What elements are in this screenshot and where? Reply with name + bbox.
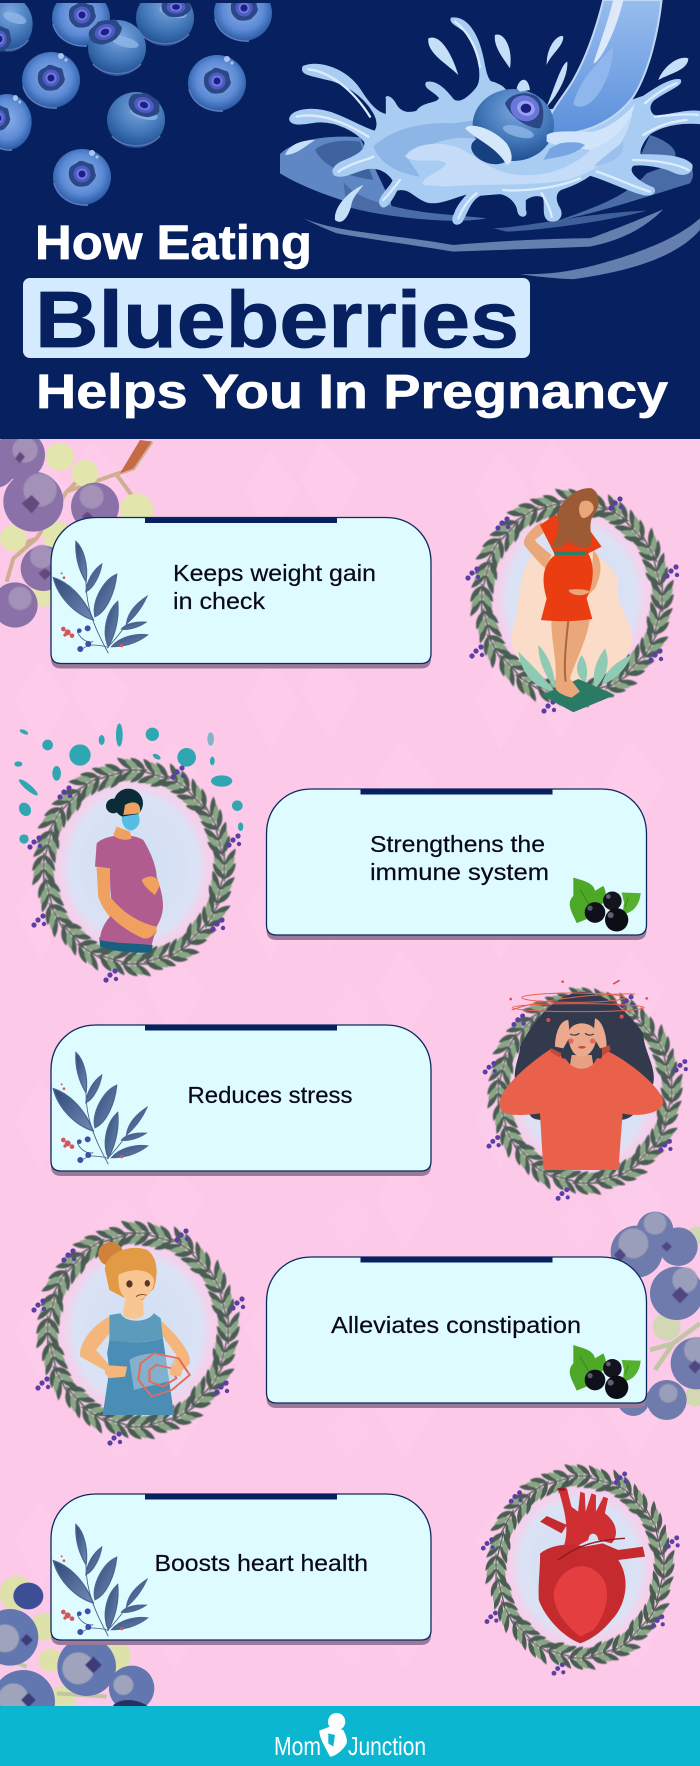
title line three: Helps You In Pregnancy [36, 366, 668, 419]
benefit text: in check [173, 588, 266, 614]
panel: strengthens the immune system [266, 789, 646, 940]
logo: MomJunction [274, 1713, 426, 1761]
panel: keeps weight gain in check [51, 518, 431, 668]
icon: blackcurrants [570, 1345, 641, 1399]
title line one: How Eating [35, 217, 312, 270]
icon: germs [14, 723, 243, 844]
benefit text: Strengthens the [370, 831, 545, 857]
blueberry cluster bottom left [0, 1576, 154, 1733]
illustration: masked pregnant woman with germs in wreath [14, 723, 243, 983]
footer band [0, 1706, 700, 1766]
benefit text [173, 560, 376, 614]
panel: alleviates constipation [266, 1257, 646, 1408]
blueberry cluster top left [0, 430, 153, 628]
logo: MomJunction: Mom [274, 1731, 321, 1761]
benefit text: immune system [370, 859, 549, 885]
small blueberries [0, 0, 272, 205]
benefit text: Keeps weight gain [173, 560, 376, 586]
highlighted word: Blueberries [35, 275, 519, 364]
illustration: stressed woman in wreath [483, 980, 688, 1201]
benefit text: Reduces stress [188, 1082, 352, 1108]
icon: leaf spray [53, 1053, 147, 1164]
icon: blackcurrants [570, 877, 641, 931]
illustration: human heart in wreath [481, 1464, 680, 1676]
blueberry cluster right [611, 1212, 700, 1420]
illustration: woman on scale in wreath [465, 488, 679, 714]
icon: leaf spray [53, 542, 147, 653]
icon: dizzy rings [512, 993, 644, 1012]
icon: leaf spray [53, 1525, 147, 1636]
benefit text: Boosts heart health [154, 1550, 368, 1576]
pink page background [0, 439, 700, 1709]
illustration: woman with stomach pain in wreath [31, 1221, 245, 1446]
logo: MomJunction: Junction [348, 1731, 426, 1761]
panel: boosts heart health [51, 1494, 431, 1645]
icon: pain hexagons [138, 1353, 190, 1397]
benefit text [370, 831, 549, 885]
milk splash with blueberry [280, 0, 700, 279]
header panel [0, 0, 700, 439]
panel: reduces stress [51, 1025, 431, 1176]
benefit text: Alleviates constipation [331, 1312, 581, 1338]
